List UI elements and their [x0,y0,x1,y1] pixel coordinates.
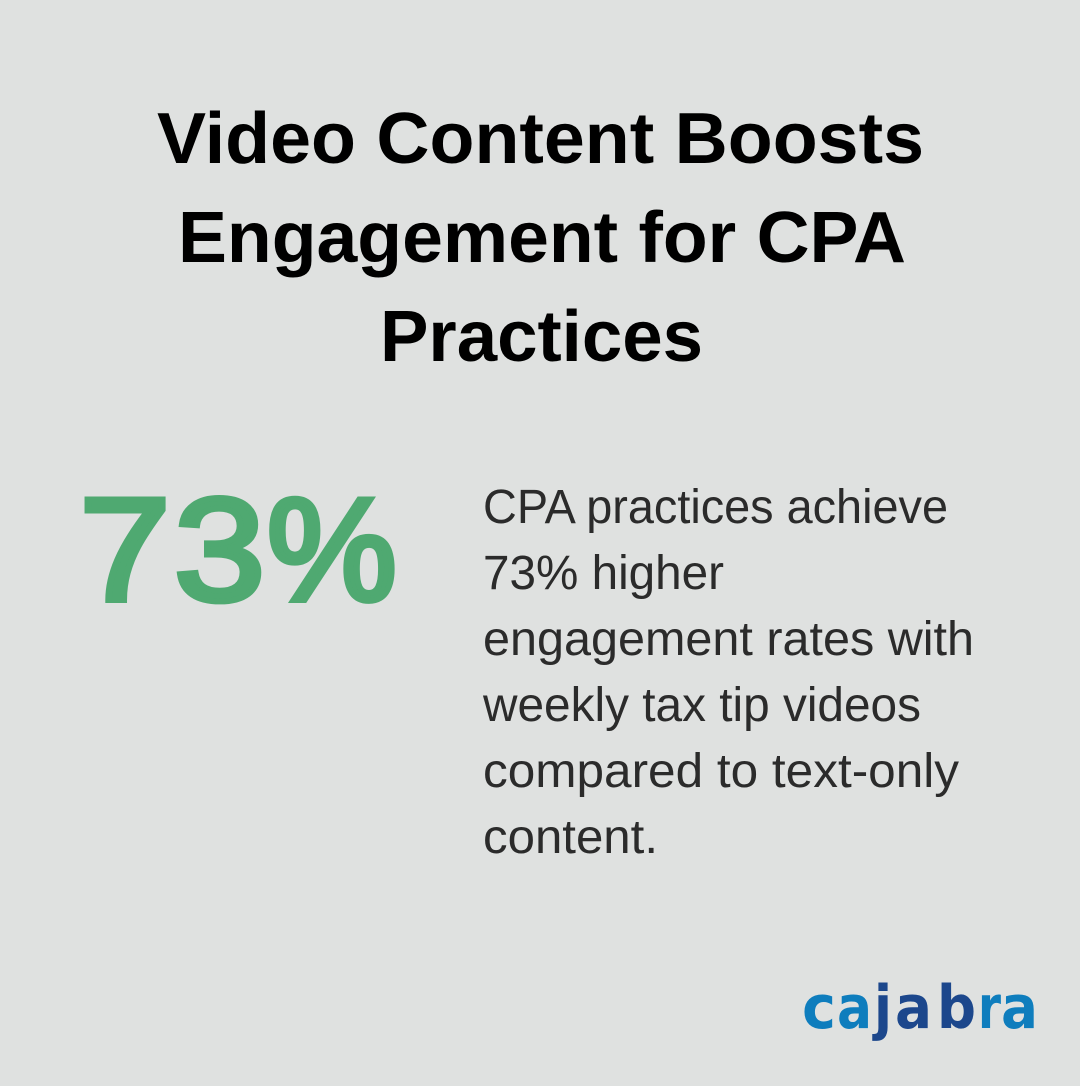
logo: cajabra [802,973,1038,1043]
title: Practices [380,297,703,377]
logo: cajabra: a [895,973,932,1043]
logo: cajabra: a [1001,973,1038,1043]
description text block [482,481,974,864]
title: Video Content Boosts [157,99,924,179]
logo: cajabra: r [978,973,1001,1043]
logo: cajabra: a [837,973,872,1043]
description text block: content. [483,811,658,864]
logo: cajabra: j [872,973,892,1043]
big statistic: 73%: % [267,468,397,631]
big statistic: 73%: 73 [80,468,265,631]
description text block: 73% higher [483,547,724,600]
description text block: weekly tax tip videos [482,679,921,732]
title [157,99,924,377]
logo: cajabra: b [937,973,976,1043]
title: Engagement for CPA [178,198,906,278]
description text block: CPA practices achieve [483,481,948,534]
logo: cajabra: c [802,973,836,1043]
big statistic: 73% [80,468,397,631]
description text block: compared to text-only [483,745,959,798]
description text block: engagement rates with [483,613,974,666]
